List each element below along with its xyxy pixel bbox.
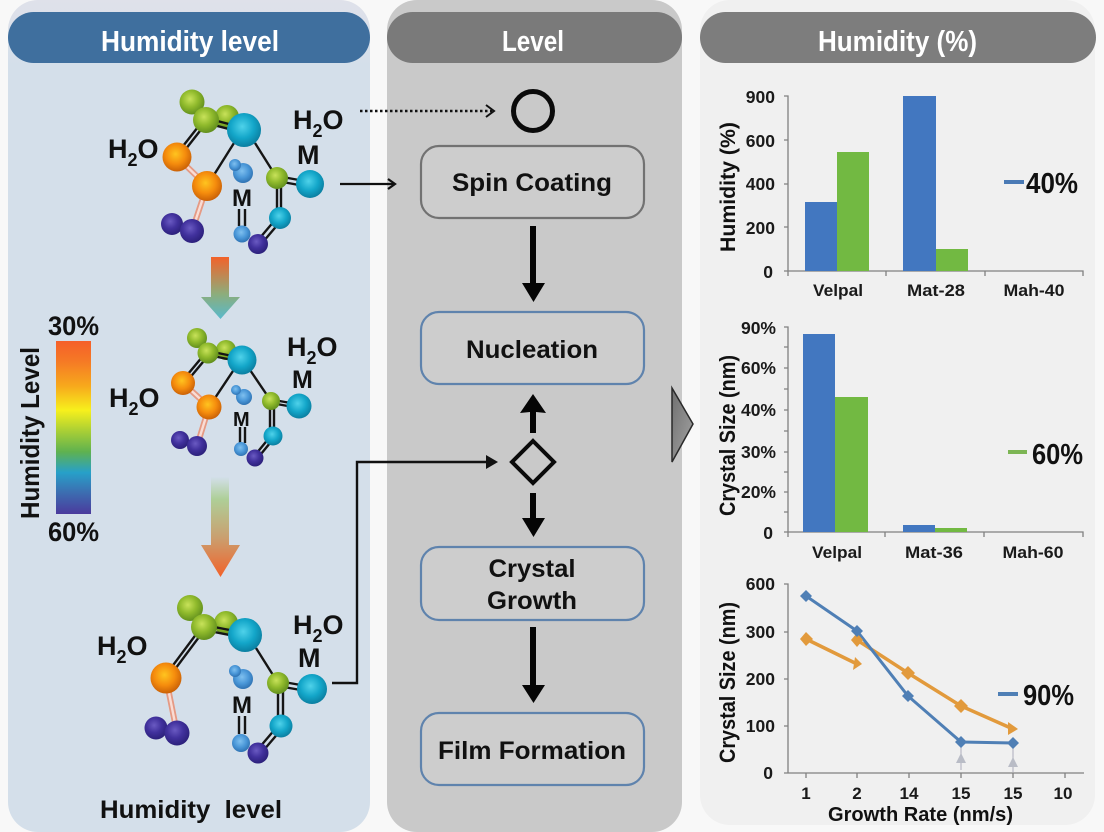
bar chart: crystal size: 60%	[741, 358, 776, 378]
bar chart: humidity: Humidity (%)	[717, 122, 740, 252]
molecule: bottom: M	[232, 692, 252, 719]
bar chart: humidity: Mat-28	[907, 281, 965, 300]
line chart: crystal size vs growth rate: Crystal Size (nm)	[715, 602, 740, 763]
line chart: crystal size vs growth rate: 14	[900, 784, 919, 803]
legend: 90%: 90%	[1023, 680, 1074, 712]
color scale: humidity level: Humidity Level	[15, 347, 45, 519]
molecule: middle	[109, 328, 338, 466]
line chart: crystal size vs growth rate: 0	[763, 763, 773, 783]
color scale: humidity level	[15, 311, 99, 547]
molecule: top: O	[323, 105, 344, 135]
arrow: green to orange gradient	[201, 477, 240, 577]
molecule: top	[108, 90, 344, 254]
header: Level: Level	[502, 26, 564, 58]
panel: humidity charts	[700, 0, 1096, 826]
molecule: top: M	[232, 185, 252, 212]
legend: 90%	[998, 680, 1074, 712]
panel background: humidity charts	[700, 0, 1095, 825]
bar chart: humidity: 400	[746, 174, 775, 194]
line chart: crystal size vs growth rate	[715, 574, 1084, 826]
step: Nucleation: Nucleation	[466, 336, 598, 364]
molecule: bottom: H	[97, 631, 116, 661]
arrow: process to charts	[672, 388, 693, 462]
bar chart: humidity: 600	[746, 131, 775, 151]
bar chart: crystal size: Mat-36	[905, 543, 963, 562]
molecule: middle: 2	[306, 348, 317, 368]
molecule: bottom: H	[293, 610, 312, 640]
line chart: crystal size vs growth rate: 300	[746, 622, 775, 642]
legend: 40%: 40%	[1026, 168, 1078, 200]
molecule: middle: H	[109, 383, 128, 413]
molecule: top: H	[108, 134, 128, 164]
line chart: crystal size vs growth rate: 1	[801, 784, 811, 803]
arrow: dotted to circle	[360, 105, 494, 117]
bar chart: crystal size: 0	[763, 523, 773, 543]
header: Humidity level	[8, 12, 370, 63]
header: Humidity (%): Humidity (%)	[818, 26, 977, 58]
molecule: top: H	[293, 105, 312, 135]
molecule: middle: O	[317, 332, 338, 362]
molecule: middle: M	[233, 409, 250, 431]
bar chart: humidity: 0	[763, 262, 773, 282]
step: Crystal Growth	[421, 547, 644, 620]
line chart: crystal size vs growth rate: 200	[746, 669, 775, 689]
header: Level	[387, 12, 682, 63]
line chart: crystal size vs growth rate: 100	[746, 716, 775, 736]
legend: 60%: 60%	[1032, 439, 1083, 471]
arrow: molecule elbow to diamond	[332, 455, 498, 683]
bar chart: humidity	[717, 87, 1083, 300]
line chart: crystal size vs growth rate: 2	[852, 784, 862, 803]
panel background: humidity level	[8, 0, 370, 832]
step: Film Formation	[421, 713, 644, 785]
line chart: crystal size vs growth rate: 15	[1004, 784, 1022, 803]
arrow: orange to teal gradient	[201, 257, 240, 319]
step: Film Formation: Film Formation	[438, 737, 626, 765]
step: Crystal Growth: Growth	[487, 587, 577, 615]
bar chart: humidity: Velpal	[813, 281, 863, 300]
molecule: bottom: O	[127, 631, 148, 661]
line chart: crystal size vs growth rate: 10	[1054, 784, 1072, 803]
arrow: molecule to spin coating	[340, 179, 395, 189]
bar chart: crystal size: 40%	[741, 400, 776, 420]
bar chart: crystal size: Crystal Size (nm)	[715, 355, 740, 516]
bar chart: humidity: 200	[746, 218, 775, 238]
molecule: middle: 2	[128, 399, 139, 419]
molecule: bottom: M	[298, 643, 320, 673]
arrow: down to crystal growth	[522, 493, 545, 537]
icon: circle	[514, 92, 552, 130]
icon: diamond	[512, 441, 554, 483]
bar chart: crystal size	[715, 318, 1083, 562]
header: Humidity level: Humidity level	[101, 26, 279, 58]
bar chart: humidity: Mah-40	[1004, 281, 1064, 300]
step: Nucleation	[421, 312, 644, 384]
step: Spin Coating	[421, 146, 644, 218]
bar chart: crystal size: 30%	[741, 442, 776, 462]
arrow: spin coating to nucleation	[522, 226, 545, 302]
line chart: crystal size vs growth rate: 600	[746, 574, 775, 594]
legend: 40%	[1004, 168, 1078, 200]
panel: process level	[387, 0, 682, 832]
panel: humidity level	[8, 0, 370, 832]
bar chart: crystal size: Mah-60	[1002, 543, 1064, 562]
step: Crystal Growth: Crystal	[488, 555, 576, 583]
molecule: top: M	[297, 140, 320, 170]
bar chart: humidity: 900	[746, 87, 775, 107]
line chart: crystal size vs growth rate: 15	[952, 784, 970, 803]
molecule: top: 2	[312, 121, 323, 141]
arrow: crystal growth to film formation	[522, 627, 545, 703]
molecule: bottom: 2	[312, 626, 323, 646]
molecule: middle: O	[139, 383, 160, 413]
arrow: up to nucleation	[520, 394, 546, 433]
molecule: top: 2	[128, 150, 138, 170]
molecule: middle: H	[287, 332, 306, 362]
bar chart: crystal size: 90%	[741, 318, 776, 338]
bar chart: crystal size: 20%	[741, 482, 776, 502]
step: Spin Coating: Spin Coating	[452, 169, 612, 197]
line chart: crystal size vs growth rate: Growth Rate (nm/s)	[828, 804, 1013, 826]
molecule: bottom	[97, 595, 344, 764]
color scale: humidity level: 60%	[48, 517, 99, 547]
molecule: top: O	[138, 134, 159, 164]
panel background: process level	[387, 0, 682, 832]
header: Humidity (%)	[700, 12, 1096, 63]
molecule: middle: M	[292, 366, 313, 394]
legend: 60%	[1008, 439, 1083, 471]
molecule: bottom: O	[323, 610, 344, 640]
caption: Humidity level: Humidity level	[100, 796, 282, 824]
color scale: humidity level: 30%	[48, 311, 99, 341]
bar chart: crystal size: Velpal	[812, 543, 862, 562]
molecule: bottom: 2	[116, 647, 127, 667]
